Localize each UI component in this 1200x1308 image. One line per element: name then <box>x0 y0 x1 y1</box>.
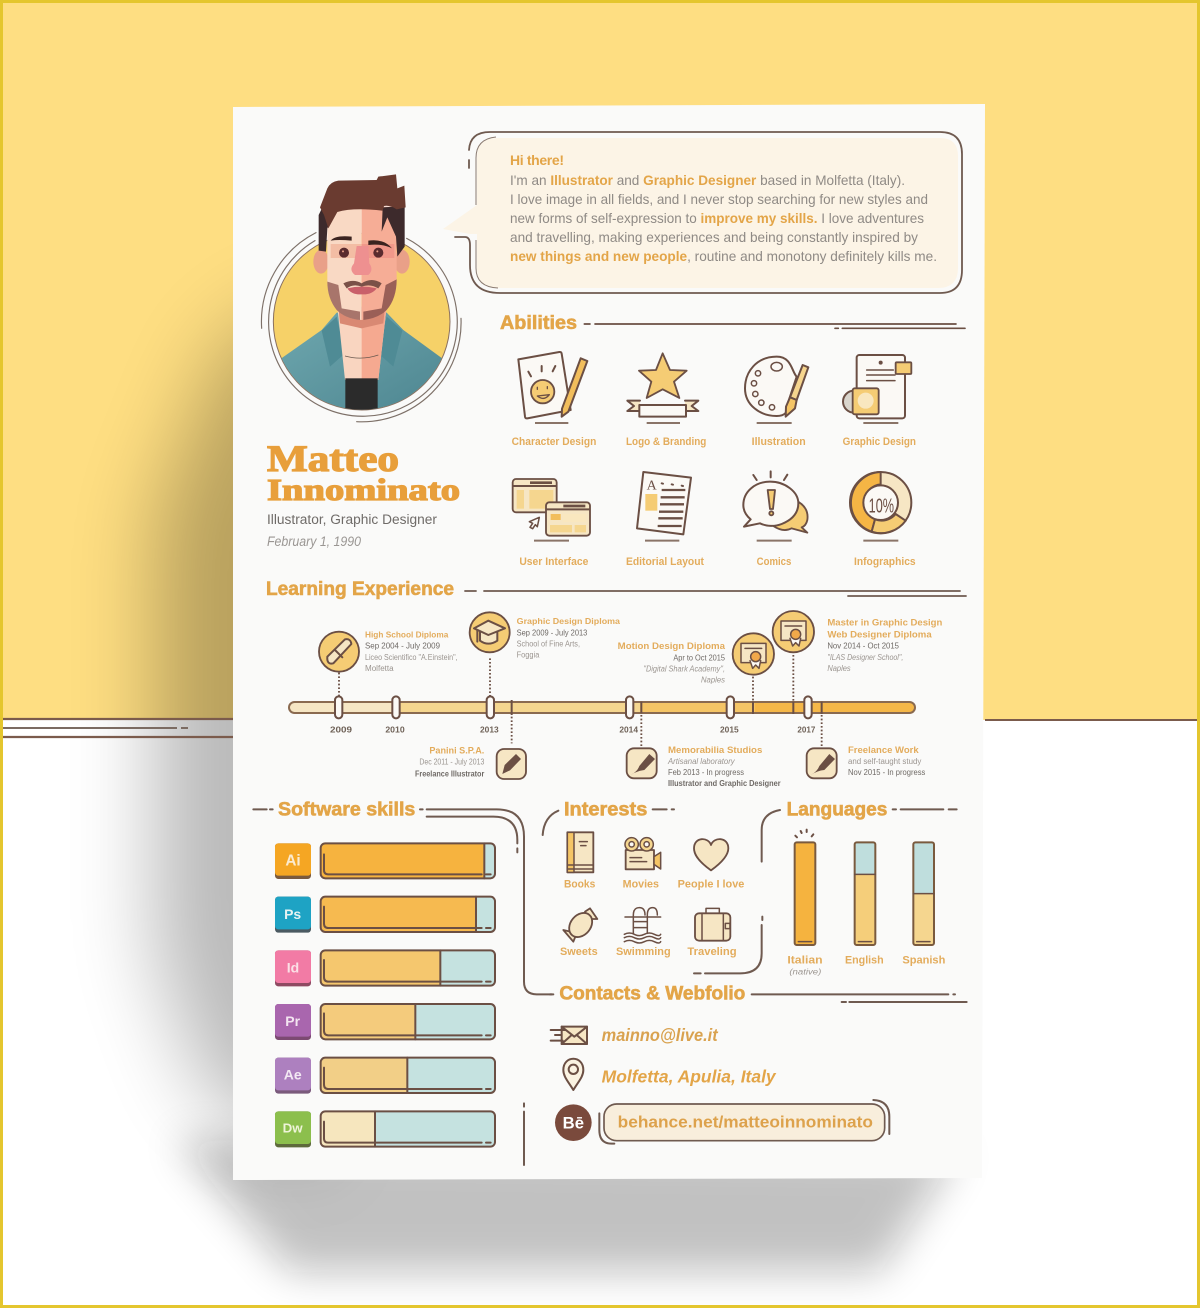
webfolio pill: behance.net/matteoinnominato <box>618 1113 873 1132</box>
floor line right <box>985 719 1197 721</box>
year labels: 2009 <box>330 725 352 735</box>
text: high school diploma: Liceo Scientifico "A.Einstein", <box>365 653 458 662</box>
email: mainno@live.it <box>602 1025 719 1045</box>
year labels: 2010 <box>385 725 405 735</box>
name: Matteo <box>267 439 399 480</box>
heading rule <box>465 591 966 596</box>
icon: sweets <box>563 908 597 942</box>
row: illustrator <box>275 843 495 879</box>
year markers <box>335 696 512 718</box>
label: Books <box>564 878 595 890</box>
label: Swimming <box>616 946 671 958</box>
heading: languages: Languages <box>787 800 887 821</box>
dark side hair <box>319 200 405 257</box>
name: Innominato <box>267 472 460 507</box>
row: photoshop <box>275 897 495 933</box>
text: freelance <box>848 745 925 777</box>
hair <box>320 174 406 228</box>
label: People I love <box>678 878 744 890</box>
label: Logo & Branding <box>626 436 706 448</box>
text: memorabilia <box>667 745 781 788</box>
text: master: Web Designer Diploma <box>827 629 932 639</box>
shadow cast by the sheet <box>155 290 960 1272</box>
text: high school diploma <box>365 631 458 673</box>
year markers <box>626 696 822 718</box>
birth date: February 1, 1990 <box>267 534 361 549</box>
heading: abilities: Abilities <box>500 313 577 334</box>
year labels <box>330 725 499 735</box>
icon: comics <box>743 471 808 541</box>
year labels: 2013 <box>480 725 499 735</box>
portrait disc <box>273 233 450 410</box>
note: native: (native) <box>789 966 821 976</box>
timeline left part <box>319 612 620 779</box>
row: indesign: Id <box>287 959 299 975</box>
label: italian: Italian <box>787 954 823 966</box>
icon: user interface <box>513 479 590 541</box>
icon: graduation <box>470 612 510 652</box>
heading: Software skills <box>278 800 415 821</box>
row: premiere: Pr <box>285 1013 301 1029</box>
text: graphic design diploma <box>517 616 620 659</box>
label: spanish: Spanish <box>902 954 946 966</box>
icon: graphic design <box>843 355 911 423</box>
nose <box>351 246 371 275</box>
jacket <box>277 307 447 413</box>
intro text <box>510 152 937 264</box>
panels: interests and languages <box>543 800 957 976</box>
intro text: Hi there! <box>510 152 564 168</box>
text: memorabilia: Memorabilia Studios <box>668 745 762 755</box>
label: Graphic Design <box>843 436 916 448</box>
eyes <box>339 248 383 258</box>
text: memorabilia: Feb 2013 - In progress <box>668 768 744 777</box>
section rules <box>550 994 967 1002</box>
label: Editorial Layout <box>626 556 704 568</box>
icon: editorial layout <box>637 472 691 541</box>
timeline bar <box>289 702 915 713</box>
row: indesign <box>275 950 495 986</box>
icon: pen badge memorabilia <box>627 748 657 778</box>
portrait <box>261 174 461 422</box>
text: graphic design diploma: Graphic Design Diploma <box>517 616 620 626</box>
panel: software skills <box>253 800 552 1165</box>
icon: swimming <box>624 908 661 943</box>
row: after effects: Ae <box>284 1066 302 1082</box>
icon: map pin <box>563 1059 583 1090</box>
icon: behance: Bē <box>563 1114 584 1133</box>
text: freelance: and self-taught study <box>848 757 921 766</box>
panel: contacts and webfolio <box>550 983 967 1144</box>
section rules <box>253 809 552 1165</box>
label: Traveling <box>687 946 737 958</box>
intro text: I love image in all fields, and I never stop searching for new styles and <box>510 191 928 207</box>
connectors <box>339 658 512 743</box>
icon: character design <box>518 352 587 423</box>
label: Illustration <box>752 436 806 448</box>
section rules <box>543 809 957 973</box>
text: master <box>827 618 943 673</box>
connectors <box>641 655 822 747</box>
text: master: Nov 2014 - Oct 2015 <box>827 642 900 651</box>
label: User Interface <box>519 556 588 568</box>
icon: motion certificate <box>733 633 774 675</box>
floor lines left <box>3 719 233 737</box>
text: motion design diploma <box>618 641 726 685</box>
icon: behance <box>555 1104 592 1141</box>
intro text: and travelling, making experiences and being constantly inspired by <box>510 229 918 245</box>
row: photoshop: Ps <box>284 906 301 922</box>
heading: interests: Interests <box>564 800 647 821</box>
row: illustrator: Ai <box>285 853 301 870</box>
icon: traveling <box>695 908 730 941</box>
icon: infographics: 10% <box>869 496 894 518</box>
icon: logo and branding <box>627 353 698 423</box>
icon: editorial layout: A <box>647 478 657 493</box>
icon: illustration <box>745 357 808 423</box>
icon: heart <box>694 839 728 870</box>
icon: high school diploma <box>319 632 359 672</box>
webfolio pill <box>599 1100 889 1144</box>
icon: mail <box>551 1027 587 1044</box>
icon: infographics <box>850 472 911 541</box>
text: master: "ILAS Designer School", <box>827 653 903 662</box>
row: dreamweaver: Dw <box>283 1120 303 1135</box>
text: high school diploma: Molfetta <box>365 664 394 673</box>
text: memorabilia: Artisanal laboratory <box>667 757 736 766</box>
text: panini: Dec 2011 - July 2013 <box>419 757 485 766</box>
heading: Contacts & Webfolio <box>559 983 745 1004</box>
ears <box>313 250 410 274</box>
bar: english <box>855 842 875 945</box>
bar: italian <box>795 830 815 945</box>
label: Comics <box>757 556 791 568</box>
text: high school diploma: High School Diploma <box>365 631 449 640</box>
intro text: new forms of self-expression to improve my skills. I love adventures <box>510 210 924 226</box>
portrait ring <box>261 233 461 422</box>
label: Infographics <box>854 556 916 568</box>
moustache and mouth <box>343 280 382 294</box>
eyebrows <box>331 236 392 248</box>
text: motion design diploma: Motion Design Diploma <box>618 641 726 651</box>
bar: spanish <box>913 842 934 945</box>
location: Molfetta, Apulia, Italy <box>602 1067 777 1087</box>
face <box>327 207 362 320</box>
abilities section <box>512 324 965 568</box>
row: premiere <box>275 1004 495 1040</box>
icon: books <box>567 832 593 872</box>
intro text: new things and new people, routine and monotony definitely kills me. <box>510 248 937 264</box>
intro text: I'm an Illustrator and Graphic Designer based in Molfetta (Italy). <box>510 172 905 188</box>
job title: Illustrator, Graphic Designer <box>267 512 438 527</box>
text: memorabilia: Illustrator and Graphic Designer <box>668 779 781 788</box>
heading: learning experience: Learning Experience <box>266 579 454 600</box>
year labels: 2014 <box>619 725 638 735</box>
text: motion design diploma: Naples <box>701 676 725 685</box>
year labels: 2015 <box>720 725 739 735</box>
label: Character Design <box>512 436 597 448</box>
text: master: Master in Graphic Design <box>827 618 943 628</box>
text: panini <box>415 746 485 779</box>
icon: master certificate <box>773 611 814 652</box>
row: dreamweaver <box>275 1111 495 1147</box>
text: graphic design diploma: Sep 2009 - July 2013 <box>517 629 588 638</box>
text: master: Naples <box>827 664 851 673</box>
icon: pen badge freelance <box>807 748 837 778</box>
speech bubble <box>443 132 962 293</box>
year labels: 2017 <box>797 725 815 735</box>
text: panini: Freelance Illustrator <box>415 770 484 779</box>
label: Movies <box>623 878 659 890</box>
label: Sweets <box>560 946 598 958</box>
icon: movies <box>625 838 661 869</box>
text: graphic design diploma: School of Fine Arts, <box>517 640 580 649</box>
cheek band <box>331 244 362 258</box>
row: after effects <box>275 1058 495 1094</box>
beard <box>327 282 360 320</box>
text: freelance: Freelance Work <box>848 745 919 755</box>
year labels <box>619 725 815 735</box>
text: motion design diploma: Apr to Oct 2015 <box>673 654 726 663</box>
timeline right part <box>618 611 943 788</box>
label: english: English <box>845 954 884 966</box>
text: freelance: Nov 2015 - In progress <box>848 768 925 777</box>
text: graphic design diploma: Foggia <box>517 650 540 659</box>
name <box>267 439 460 507</box>
paper sheet <box>233 104 985 1180</box>
text: panini: Panini S.P.A. <box>429 746 484 756</box>
text: high school diploma: Sep 2004 - July 2009 <box>365 642 441 651</box>
icon: pencil badge <box>497 749 526 779</box>
text: motion design diploma: "Digital Shark Academy", <box>643 665 725 674</box>
